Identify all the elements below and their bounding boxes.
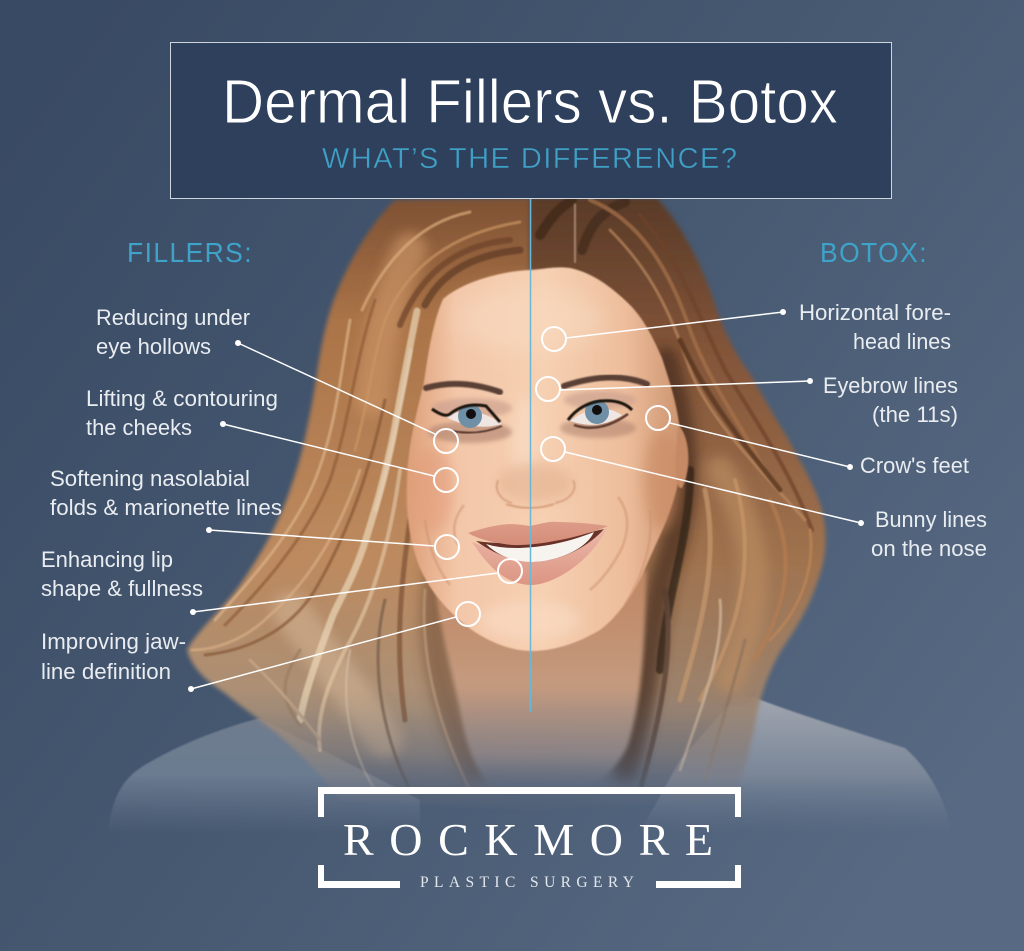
label: lips: Enhancing lip — [41, 547, 173, 572]
right ear — [675, 425, 688, 488]
label: jawline: line definition — [41, 659, 171, 684]
label: nasolabial folds: folds & marionette lines — [50, 495, 282, 520]
label: jawline — [41, 629, 186, 684]
title: Dermal Fillers vs. Botox — [222, 68, 838, 137]
logo bracket frame — [318, 787, 741, 888]
label: eyebrow lines: (the 11s) — [872, 402, 958, 427]
label: bunny lines: Bunny lines — [875, 507, 987, 532]
label: forehead lines: Horizontal fore- — [799, 300, 951, 325]
marker: lip — [190, 559, 522, 615]
label: under eye hollows: Reducing under — [96, 305, 250, 330]
logo tagline: PLASTIC SURGERY — [420, 874, 634, 891]
label: eyebrow lines — [823, 373, 958, 427]
marker: jawline — [188, 602, 480, 692]
marker: bunny lines — [541, 437, 864, 526]
label: lips: shape & fullness — [41, 576, 203, 601]
smile lines — [425, 497, 651, 605]
label: nasolabial folds — [50, 466, 282, 520]
marker: nasolabial — [206, 527, 459, 559]
label: under eye hollows: eye hollows — [96, 334, 211, 359]
panel: botox labels — [799, 300, 987, 561]
nose — [497, 463, 574, 508]
shoulders and white top — [112, 699, 944, 818]
callouts: filler markers — [188, 340, 522, 692]
marker: crow's feet — [646, 406, 853, 470]
label: bunny lines — [871, 507, 987, 561]
eyebrows — [426, 377, 647, 392]
hair strands left — [192, 212, 520, 790]
logo — [318, 787, 741, 891]
hair and neck fading downward — [187, 198, 825, 810]
label: cheeks: the cheeks — [86, 415, 192, 440]
label: nasolabial folds: Softening nasolabial — [50, 466, 250, 491]
cheek and forehead shading — [410, 288, 680, 638]
lips and teeth — [468, 522, 608, 585]
heading: fillers: FILLERS: — [127, 237, 253, 268]
label: bunny lines: on the nose — [871, 536, 987, 561]
center divider line — [530, 199, 532, 712]
callouts: botox markers — [536, 309, 864, 526]
subtitle: WHAT’S THE DIFFERENCE? — [322, 143, 737, 175]
panel: fillers labels — [41, 305, 282, 684]
label: jawline: Improving jaw- — [41, 629, 186, 654]
marker: cheek — [220, 421, 458, 492]
marker: under eye — [235, 340, 458, 453]
portrait photo of woman — [108, 198, 952, 832]
hair right — [530, 198, 825, 810]
label: cheeks — [86, 386, 278, 440]
logo wordmark: ROCKMORE — [343, 814, 713, 865]
label: under eye hollows — [96, 305, 250, 359]
label: cheeks: Lifting & contouring — [86, 386, 278, 411]
label: eyebrow lines: Eyebrow lines — [823, 373, 958, 398]
label: crow's feet: Crow's feet — [860, 453, 969, 478]
label: forehead lines — [799, 300, 951, 354]
label: lips — [41, 547, 203, 601]
right eye — [560, 391, 636, 438]
hair left — [187, 198, 530, 810]
face — [407, 267, 681, 651]
title box — [170, 42, 892, 198]
marker: forehead — [542, 309, 786, 351]
neck — [434, 570, 648, 780]
hair shading near face — [290, 250, 754, 770]
label: forehead lines: head lines — [853, 329, 951, 354]
marker: eyebrow — [536, 377, 813, 401]
left eye — [428, 398, 512, 443]
heading: botox: BOTOX: — [820, 237, 928, 268]
hair strands right — [540, 200, 812, 790]
